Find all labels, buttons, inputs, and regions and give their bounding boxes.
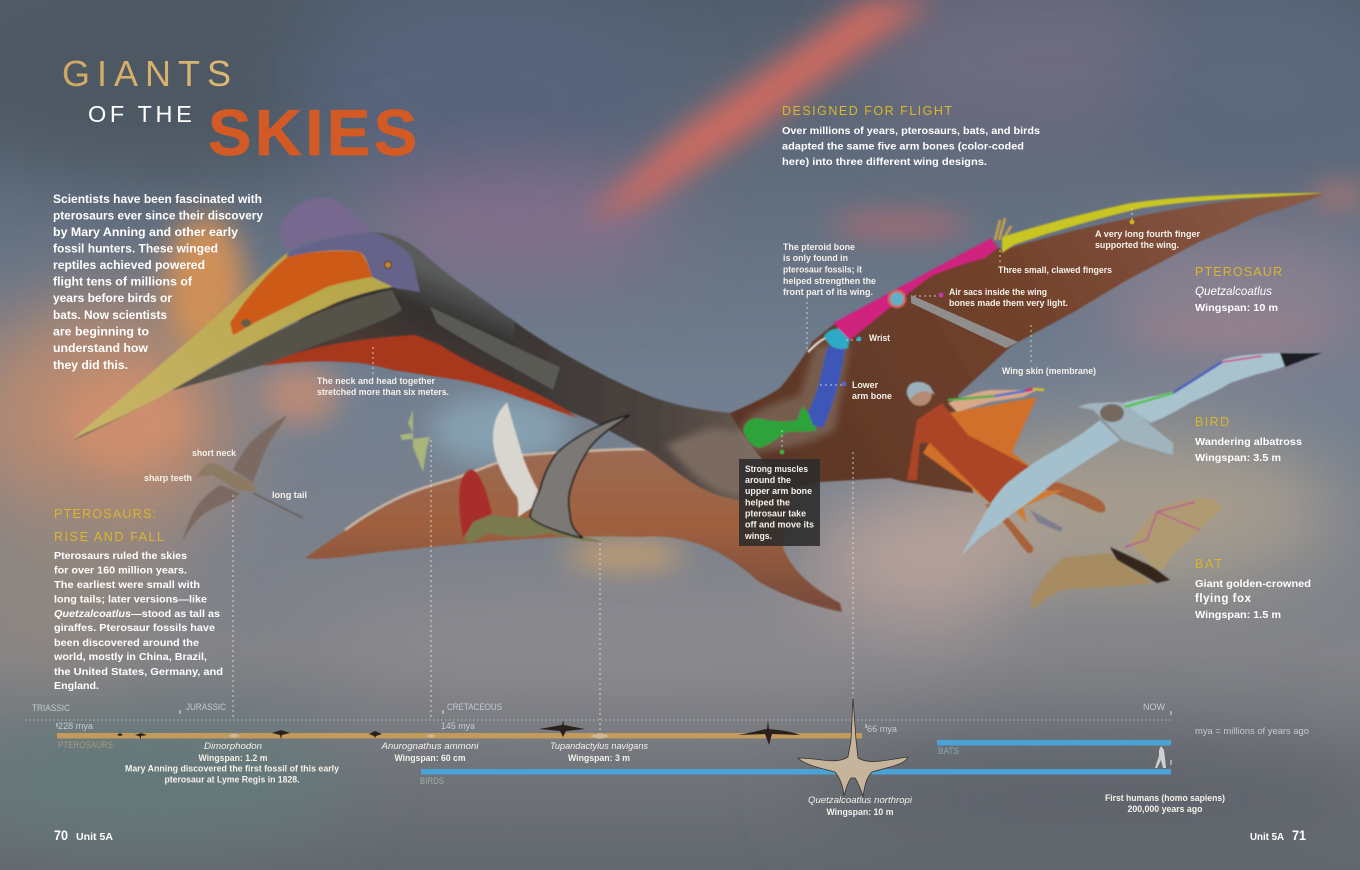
species captions: Wingspan: 1.2 m: [198, 752, 268, 763]
title: GIANTS: [62, 53, 238, 94]
Designed for flight block: here) into three different wing designs.: [782, 156, 987, 168]
era labels: 228 mya: [58, 721, 93, 731]
Pterosaurs rise and fall block: RISE AND FALL: [54, 530, 164, 544]
arm: [948, 390, 1037, 412]
page number right: [1250, 828, 1306, 843]
bar labels: BATS: [938, 746, 959, 756]
species captions: First humans (homo sapiens): [1105, 792, 1225, 803]
timeline: [25, 698, 1309, 817]
Dimorphodon labels: [144, 447, 307, 500]
air sac detail: [889, 291, 905, 307]
colour-coded wing bones: [740, 193, 1325, 452]
neck ruff: [1100, 404, 1124, 422]
legend: bat: flying fox: [1195, 593, 1252, 605]
head and body: [197, 463, 256, 492]
Pterosaurs rise and fall block: [53, 507, 223, 692]
Designed for flight block: [782, 104, 1040, 168]
page number right: 71: [1292, 828, 1306, 843]
wing section cut-out: [911, 295, 1018, 348]
species captions: Mary Anning discovered the first fossil of this early: [125, 762, 340, 774]
body: [1110, 547, 1170, 583]
intro paragraph: years before birds or: [53, 291, 172, 305]
legend: bird: BIRD: [1195, 415, 1229, 429]
Quetzalcoatlus silhouette: [798, 698, 908, 796]
intro paragraph: understand how: [53, 341, 149, 355]
wing anatomy labels: pterosaur fossils; it: [783, 264, 862, 274]
page number left: 70: [54, 828, 68, 843]
rear neck: [505, 318, 810, 500]
Tupandactylus illustration: [459, 402, 630, 543]
neck note: [317, 375, 449, 397]
Designed for flight block: adapted the same five arm bones (color-coded: [782, 140, 1024, 152]
legend: bird: [1195, 415, 1302, 464]
legend: bat: Giant golden-crowned: [1195, 578, 1311, 590]
upper wing: [1123, 353, 1321, 423]
Designed for flight block: DESIGNED FOR FLIGHT: [782, 104, 952, 118]
era labels: JURASSIC: [186, 702, 226, 712]
right wing: [1130, 498, 1222, 570]
Pterosaurs rise and fall block: world, mostly in China, Brazil,: [53, 651, 207, 663]
era labels: 66 mya: [867, 724, 897, 734]
legend: pterosaur: Quetzalcoatlus: [1195, 286, 1272, 298]
era labels: CRETACEOUS: [447, 702, 502, 712]
upper arm bone (green): [743, 407, 817, 448]
wing anatomy labels: [783, 228, 1200, 401]
Pterosaurs rise and fall block: England.: [54, 680, 99, 692]
legend: pterosaur: Wingspan: 10 m: [1195, 302, 1278, 314]
legend: bat: [1195, 557, 1311, 621]
callout: strong muscles: [739, 459, 820, 546]
title: [62, 53, 421, 169]
title: SKIES: [208, 96, 421, 169]
species captions: Wingspan: 3 m: [568, 752, 630, 763]
wing bones: [1125, 502, 1200, 547]
black-edged wing: [530, 415, 630, 538]
wing anatomy labels: The pteroid bone: [783, 241, 855, 252]
dashed leader lines: [233, 208, 1132, 735]
orange wing: [923, 397, 1037, 503]
intro paragraph: reptiles achieved powered: [53, 258, 205, 272]
lower jaw: [73, 290, 402, 440]
far wing of Quetzalcoatlus: [305, 448, 842, 612]
wing anatomy labels: Air sacs inside the wing: [949, 286, 1047, 297]
species captions: pterosaur at Lyme Regis in 1828.: [164, 774, 300, 784]
Designed for flight block: Over millions of years, pterosaurs, bats, and birds: [782, 125, 1040, 137]
suit: [907, 403, 1030, 503]
species captions: [125, 740, 1225, 817]
intro paragraph: by Mary Anning and other early: [53, 225, 238, 239]
pterosaurs bar: [57, 733, 862, 738]
crest: [281, 197, 372, 250]
wing anatomy labels: helped strengthen the: [783, 275, 876, 286]
hand bone (magenta): [833, 238, 998, 340]
page number left: [54, 828, 113, 843]
species captions: Wingspan: 60 cm: [394, 752, 466, 763]
legend: bird: Wingspan: 3.5 m: [1195, 452, 1281, 464]
species captions: Quetzalcoatlus northropi: [808, 794, 913, 805]
Pterosaurs rise and fall block: the United States, Germany, and: [54, 666, 223, 678]
callout: strong muscles: off and move its: [745, 518, 814, 530]
Pterosaurs rise and fall block: Pterosaurs ruled the skies: [54, 550, 187, 562]
bone halo: [740, 345, 850, 452]
wing anatomy labels: is only found in: [783, 252, 848, 263]
neck note: stretched more than six meters.: [317, 386, 449, 397]
legend: bird: Wandering albatross: [1195, 436, 1302, 448]
species captions: 200,000 years ago: [1128, 803, 1203, 814]
wing anatomy labels: Wing skin (membrane): [1002, 365, 1096, 376]
purple face: [287, 232, 420, 292]
fourth finger (yellow): [1002, 193, 1325, 253]
wrist (teal): [824, 328, 851, 349]
intro paragraph: pterosaurs ever since their discovery: [53, 208, 263, 222]
wing anatomy labels: arm bone: [852, 390, 892, 401]
belly: [665, 428, 790, 498]
intro paragraph: [53, 192, 263, 372]
human silhouette: [1155, 746, 1166, 768]
wing tip: [1280, 353, 1322, 367]
red crest: [459, 470, 492, 537]
nostril: [241, 319, 251, 327]
lower wing: [960, 420, 1120, 557]
era labels: NOW: [1143, 702, 1166, 712]
upper wing: [233, 415, 287, 482]
wing anatomy labels: supported the wing.: [1095, 239, 1179, 250]
callout: strong muscles: helped the: [745, 496, 790, 508]
wing anatomy labels: Lower: [852, 379, 878, 390]
neck note: The neck and head together: [317, 375, 435, 386]
Pterosaurs rise and fall block: long tails; later versions—like: [54, 594, 207, 606]
intro paragraph: are beginning to: [53, 324, 149, 338]
front neck: [240, 232, 515, 388]
intro paragraph: Scientists have been fascinated with: [53, 192, 262, 206]
albatross: [960, 353, 1322, 557]
page number left: Unit 5A: [76, 831, 113, 843]
species captions: Anurognathus ammoni: [380, 740, 479, 751]
era labels: TRIASSIC: [32, 703, 70, 713]
Dimorphodon labels: sharp teeth: [144, 472, 192, 483]
orange face patch: [230, 251, 372, 335]
era labels: 145 mya: [441, 721, 475, 731]
Pterosaurs rise and fall block: Quetzalcoatlus—stood as tall as: [54, 608, 220, 620]
callout: strong muscles: wings.: [744, 530, 772, 541]
legend: bat: BAT: [1195, 557, 1222, 571]
species captions: Tupandactylus navigans: [550, 740, 648, 751]
page number right: Unit 5A: [1250, 831, 1284, 843]
Pterosaurs rise and fall block: for over 160 million years.: [54, 564, 187, 576]
lower wing: [182, 485, 240, 542]
bar labels: BIRDS: [420, 776, 444, 786]
faded silhouettes on bar: [228, 733, 610, 739]
species captions: Wingspan: 10 m: [826, 806, 894, 817]
intro paragraph: fossil hunters. These winged: [53, 242, 218, 256]
arm bones: [948, 389, 1044, 400]
white sail: [493, 402, 538, 517]
wing anatomy labels: Wrist: [869, 332, 890, 343]
species captions: Dimorphodon: [204, 740, 262, 751]
human wingsuit figure: [907, 382, 1044, 503]
main pterosaur head and neck: [73, 197, 810, 500]
Pterosaurs rise and fall block: giraffes. Pterosaur fossils have: [54, 622, 215, 634]
callout: strong muscles: around the: [745, 474, 791, 485]
fruit bat: [1031, 498, 1222, 610]
pteroid bone: [808, 337, 828, 352]
bar labels: PTEROSAURS: [58, 740, 113, 750]
title: OF THE: [88, 101, 195, 127]
neck skeleton overlay: [430, 307, 560, 390]
upper beak: [73, 240, 398, 438]
wing anatomy labels: Three small, clawed fingers: [998, 264, 1112, 275]
era labels: [32, 702, 1309, 736]
Dimorphodon illustration: [182, 415, 303, 542]
Pterosaurs rise and fall block: PTEROSAURS:: [54, 507, 156, 521]
Anurognathus illustration: [400, 410, 430, 472]
legend: pterosaur: [1195, 265, 1282, 314]
callout: strong muscles: Strong muscles: [745, 463, 808, 474]
left wing: [1031, 553, 1153, 610]
tail: [253, 493, 303, 518]
Pterosaurs rise and fall block: The earliest were small with: [54, 579, 200, 591]
callout dots: [780, 220, 1134, 454]
intro paragraph: bats. Now scientists: [53, 308, 167, 322]
red throat: [262, 335, 578, 418]
callout: strong muscles: pterosaur take: [745, 508, 806, 518]
small silhouettes: [117, 720, 800, 745]
Pterosaurs rise and fall block: been discovered around the: [54, 637, 199, 649]
head and helmet: [908, 382, 932, 406]
intro paragraph: they did this.: [53, 358, 128, 372]
era labels: mya = millions of years ago: [1195, 726, 1309, 736]
body: [1078, 402, 1173, 455]
bar labels: [58, 740, 959, 786]
eye: [384, 262, 392, 268]
head and body: [465, 515, 603, 543]
bats bar: [937, 740, 1171, 746]
wing anatomy labels: A very long fourth finger: [1095, 228, 1200, 239]
birds bar: [421, 769, 1171, 774]
near wing membrane: [730, 193, 1325, 493]
wing anatomy labels: front part of its wing.: [783, 286, 873, 297]
Dimorphodon labels: short neck: [192, 447, 237, 458]
pterosaur legs behind figures: [985, 470, 1105, 553]
Dimorphodon labels: long tail: [272, 489, 307, 500]
clawed fingers: [995, 218, 1011, 240]
callout: strong muscles: upper arm bone: [745, 485, 812, 496]
legend: bat: Wingspan: 1.5 m: [1195, 609, 1281, 621]
lower arm bone (blue): [808, 346, 845, 428]
legend: pterosaur: PTEROSAUR: [1195, 265, 1282, 279]
wing anatomy labels: bones made them very light.: [949, 297, 1068, 308]
wing bones: [1125, 356, 1262, 407]
intro paragraph: flight tens of millions of: [53, 274, 192, 288]
